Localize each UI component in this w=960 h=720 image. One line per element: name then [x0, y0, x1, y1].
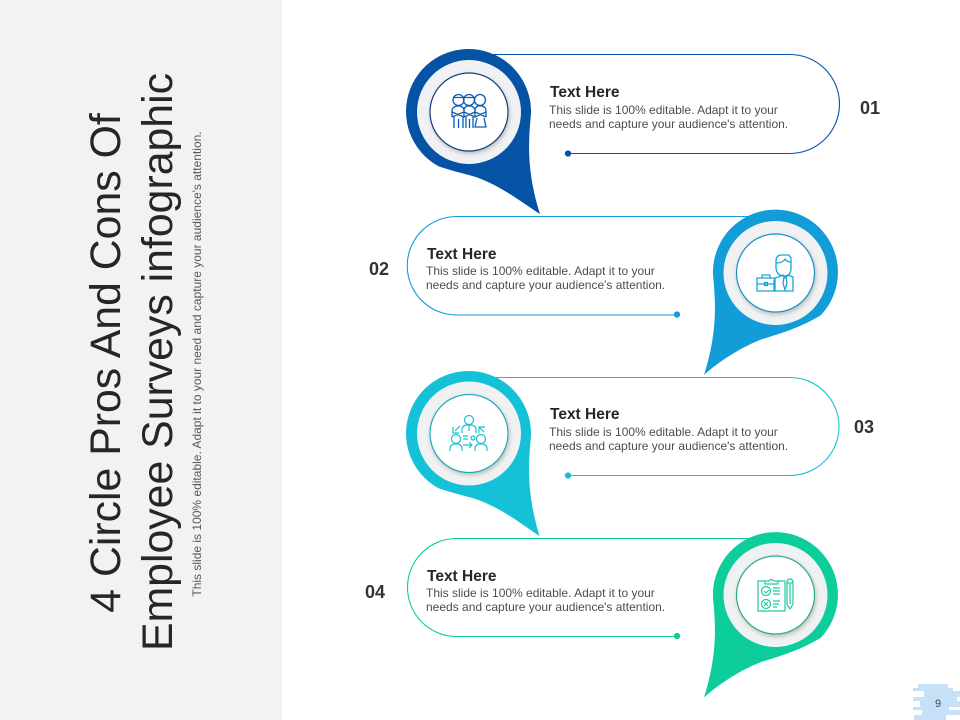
capsule outline 04	[407, 538, 750, 639]
pin marker 01	[406, 49, 540, 214]
title: 4 Circle Pros And Cons Of	[82, 113, 130, 613]
panel: item 02	[369, 210, 838, 375]
number 03: 03	[854, 417, 874, 437]
body text 02: needs and capture your audience's attention.	[426, 278, 665, 292]
panel: left title sidebar	[0, 0, 282, 720]
body text 03: This slide is 100% editable. Adapt it to your	[549, 425, 778, 439]
capsule outline 03	[490, 378, 839, 478]
panel: item 01	[406, 49, 880, 214]
body text 02: This slide is 100% editable. Adapt it to your	[426, 264, 655, 278]
body text 01: needs and capture your audience's attention.	[549, 117, 788, 131]
heading 04: Text Here	[427, 568, 497, 585]
body text 04: This slide is 100% editable. Adapt it to your	[426, 586, 655, 600]
title	[82, 73, 182, 651]
heading 03: Text Here	[550, 406, 620, 423]
heading 02: Text Here	[427, 246, 497, 263]
body text 01: This slide is 100% editable. Adapt it to your	[549, 103, 778, 117]
pin marker 02	[704, 210, 838, 375]
body text 03: needs and capture your audience's attention.	[549, 439, 788, 453]
icon: team of three people	[452, 94, 486, 128]
body text 04	[426, 586, 665, 614]
body text 03	[549, 425, 788, 453]
number 04: 04	[365, 582, 385, 602]
body text 02	[426, 264, 665, 292]
body text 01	[549, 103, 788, 131]
page number badge: 9	[935, 698, 941, 710]
heading 01: Text Here	[550, 84, 620, 101]
capsule outline 01	[490, 54, 839, 156]
panel: item 03	[406, 371, 874, 536]
pin marker 04	[704, 532, 838, 698]
body text 04: needs and capture your audience's attention.	[426, 600, 665, 614]
pin marker 03	[406, 371, 540, 536]
icon: survey clipboard and pencil	[758, 579, 793, 611]
icon: employee with briefcase	[757, 255, 793, 291]
subtitle: This slide is 100% editable. Adapt it to your need and capture your audience's attention.	[190, 131, 204, 597]
panel: item 04	[365, 532, 838, 698]
number 02: 02	[369, 259, 389, 279]
title: Employee Surveys infographic	[134, 73, 182, 651]
icon: group discussion with arrows	[450, 416, 487, 451]
number 01: 01	[860, 98, 880, 118]
capsule outline 02	[407, 216, 750, 317]
page number badge	[913, 684, 960, 720]
